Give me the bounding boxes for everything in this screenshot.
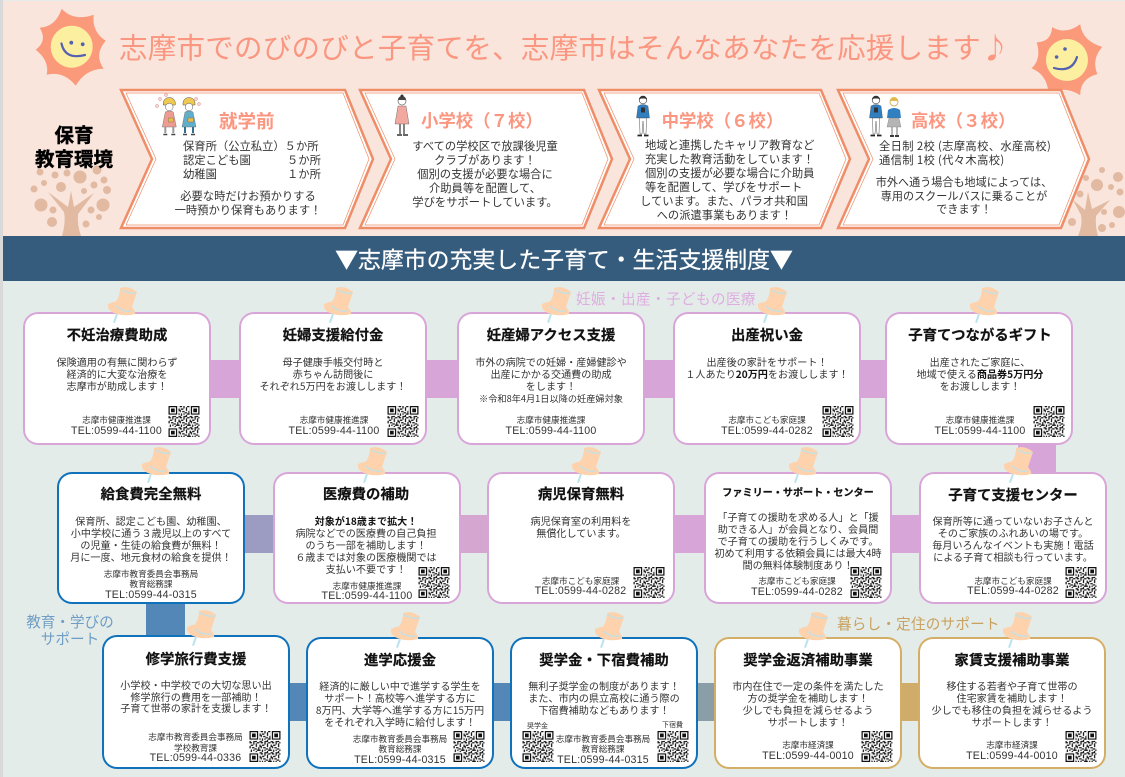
- card body: 8万円、大学等へ進学する方に15万円: [316, 702, 484, 717]
- pin: [795, 611, 829, 649]
- description: [412, 138, 558, 210]
- card title: 出産祝い金: [731, 324, 803, 345]
- facility counts: １か所: [287, 166, 321, 182]
- contact: TEL:0599-44-1100: [322, 590, 412, 602]
- heading: childcare and education environment: 保育: [54, 119, 94, 148]
- QR code: [850, 567, 882, 598]
- top peach header background: [3, 1, 1125, 236]
- card body: そのご家族のふれあいの場です。: [938, 525, 1088, 540]
- panel: junior high school: [597, 88, 852, 230]
- card body: をそれぞれ入学時に給付します！: [324, 714, 476, 729]
- card body: [510, 680, 698, 716]
- card: childcare support center: [919, 472, 1107, 604]
- contact: [510, 734, 696, 765]
- contact: TEL:0599-44-1100: [289, 425, 379, 437]
- pin: [142, 447, 171, 483]
- contact: TEL:0599-44-0010: [966, 750, 1058, 762]
- card body: １人あたり20万円をお渡しします！: [685, 366, 849, 381]
- card title: 子育てつながるギフト: [908, 324, 1052, 345]
- description: 等を配置して、学びをサポート: [645, 179, 802, 195]
- card body: [918, 680, 1106, 728]
- contact: [934, 414, 1025, 437]
- card body: 志摩市が助成します！: [67, 378, 167, 393]
- contact: [487, 576, 674, 596]
- contact: 志摩市こども家庭課: [728, 414, 806, 426]
- description: 個別の支援が必要な場合に介助員: [645, 165, 814, 181]
- contact: [919, 576, 1107, 596]
- card: pregnant women access support: [457, 312, 645, 445]
- pin: [542, 287, 571, 323]
- heading: 高校（３校）: [911, 108, 1015, 133]
- contact: [721, 414, 813, 437]
- contact: TEL:0599-44-0315: [557, 754, 649, 766]
- card body: 市内在住で一定の条件を満たした: [732, 678, 884, 693]
- heading: 中学校（６校）: [662, 108, 783, 133]
- contact: [918, 740, 1106, 762]
- pin: [785, 446, 819, 484]
- school counts: [879, 138, 1051, 168]
- card title: 病児保育無料: [538, 483, 624, 504]
- connector row 1: [205, 360, 1035, 398]
- card body: [704, 511, 892, 571]
- pin: [591, 611, 625, 649]
- contact: [71, 414, 162, 437]
- card body: で子育ての援助を行うしくみです。: [718, 533, 878, 548]
- contact: TEL:0599-44-0010: [762, 750, 854, 762]
- card body: 出産されたご家庭に、: [930, 354, 1030, 369]
- card body: [917, 354, 1044, 393]
- card body: 保険適用の有無に関わらず: [57, 354, 177, 369]
- chevron shape with illustration of a girl: [358, 88, 614, 230]
- card body: 少しでも負担を減らせるよう: [743, 702, 873, 717]
- card body: をお渡しします！: [940, 378, 1020, 393]
- contact: 教育総務課: [378, 743, 421, 755]
- description: 介助員等を配置して、: [429, 180, 541, 196]
- contact: TEL:0599-44-0315: [105, 588, 197, 600]
- boarding QR code: [656, 731, 688, 762]
- card body: 修学旅行の費用を一部補助！: [130, 689, 262, 704]
- contact: TEL:0599-44-1100: [506, 425, 596, 437]
- heading: 小学校（７校）: [421, 108, 543, 133]
- card body: をします！: [526, 378, 576, 393]
- card: childcare connection gift: [885, 312, 1073, 445]
- connector row 2 right: [670, 515, 925, 553]
- chevron shape with illustration of a boy: [597, 88, 852, 230]
- card body: [102, 679, 290, 714]
- school bus text: 市外へ通う場合も地域によっては、: [876, 174, 1052, 190]
- card body: 小学校・中学校での大切な思い出: [120, 677, 272, 692]
- contact: 志摩市経済課: [986, 738, 1038, 750]
- panel: preschool: [119, 88, 374, 230]
- card body: [273, 515, 459, 575]
- card body: 保育所等に通っていないお子さんと: [932, 513, 1094, 528]
- description: への派遣事業もあります！: [657, 207, 792, 223]
- card body: 住宅家賃を補助します！: [956, 690, 1068, 705]
- section banner: ▼志摩市の充実した子育て・生活支援制度▼: [335, 241, 793, 275]
- connector row 3 blue: [285, 683, 515, 721]
- pin: [758, 287, 787, 323]
- description: 個別の支援が必要な場合に: [417, 166, 553, 182]
- card body: [685, 354, 849, 381]
- QR code: [1065, 731, 1097, 762]
- pin: [999, 611, 1033, 649]
- card body: 移住する若者や子育て世帯の: [946, 678, 1078, 693]
- category label: education and learning support: 教育・学びの: [26, 611, 114, 632]
- card body: [475, 354, 627, 405]
- card body: 毎月いろんなイベントも実施！電話: [932, 537, 1094, 552]
- connector row 3 gold: [898, 683, 922, 721]
- school counts: 通信制 1校 (代々木高校): [879, 152, 1005, 168]
- heading: childcare and education environment: 教育環境: [35, 143, 113, 172]
- card title: 家賃支援補助事業: [954, 649, 1070, 670]
- card body: 母子健康手帳交付時と: [283, 354, 383, 369]
- card body: 出産後の家計をサポート！: [706, 354, 828, 369]
- card: scholarship and boarding subsidy: [510, 637, 698, 769]
- pin: [183, 609, 217, 647]
- card: rent support subsidy: [918, 637, 1106, 769]
- card body: サポートします！: [768, 714, 848, 729]
- card body: 市外の病院での妊婦・産婦健診や: [475, 354, 627, 369]
- contact: 志摩市健康推進課: [517, 414, 585, 426]
- panel: high school: [836, 88, 1090, 230]
- facility counts: [183, 138, 321, 182]
- card body: 病児保育室の利用料を: [531, 513, 631, 528]
- connector row 3 blue to gold: [695, 683, 717, 721]
- school counts: 全日制 2校 (志摩高校、水産高校): [879, 138, 1051, 154]
- contact: 志摩市こども家庭課: [758, 575, 836, 587]
- card body: 月に一度、地元食材の給食を提供！: [70, 549, 232, 564]
- QR code: [861, 731, 893, 762]
- contact: [288, 414, 379, 437]
- QR code: [249, 731, 281, 762]
- card body: [57, 515, 245, 563]
- card body: 支払い不要です！: [326, 561, 406, 576]
- card body: 保育所、認定こども園、幼稚園、: [75, 513, 227, 528]
- card body: の児童・生徒の給食費が無料！: [80, 537, 222, 552]
- card body: [260, 354, 406, 393]
- card title: 不妊治療費助成: [67, 324, 167, 345]
- card body: のうち一部を補助します！: [305, 537, 427, 552]
- pin: [1000, 446, 1034, 484]
- card body: ※令和8年4月1日以降の妊産婦対象: [479, 391, 623, 405]
- description: 地域と連携したキャリア教育など: [645, 137, 814, 153]
- facility counts: 幼稚園: [183, 166, 217, 182]
- contact: 志摩市こども家庭課: [542, 574, 619, 586]
- card body: による子育て相談も行っています。: [933, 549, 1093, 564]
- card: medical expense subsidy: [273, 472, 461, 604]
- card title: 進学応援金: [364, 649, 436, 670]
- card body: サポートします！: [972, 714, 1052, 729]
- card title: 妊婦支援給付金: [283, 324, 383, 345]
- lower background panel: [3, 281, 1125, 777]
- contact: TEL:0599-44-0336: [150, 752, 241, 764]
- contact: [102, 732, 289, 764]
- contact: 学校教育課: [174, 742, 217, 754]
- contact: TEL:0599-44-0282: [535, 585, 626, 597]
- card body: 間の無料体験制度あり！: [742, 557, 854, 572]
- card: scholarship repayment subsidy: [714, 637, 902, 769]
- contact: TEL:0599-44-0282: [751, 586, 843, 598]
- card: free school lunches: [57, 472, 245, 604]
- category label: education and learning support: サポート: [41, 628, 99, 649]
- contact: 志摩市教育委員会事務局: [148, 731, 243, 743]
- description: クラブがあります！: [434, 152, 536, 168]
- pin: [568, 446, 602, 484]
- contact: 志摩市健康推進課: [82, 414, 151, 426]
- scholarship QR code: [522, 731, 554, 762]
- category label: education and learning support: [26, 611, 114, 649]
- card body: 「子育ての援助を求める人」と「援: [717, 509, 879, 524]
- card title: ファミリー・サポート・センター: [722, 484, 874, 499]
- card body: [714, 680, 902, 728]
- card: pregnancy support benefit: [239, 312, 427, 445]
- contact: [57, 568, 245, 600]
- QR code: [388, 406, 418, 437]
- pin: [324, 287, 353, 323]
- icon: left smiling sun: [36, 8, 106, 86]
- pin: [387, 611, 421, 649]
- connector row 1 to row 2: [1018, 440, 1056, 480]
- card body: サポート！高校等へ進学する方に: [324, 690, 476, 705]
- chevron shape with illustration of two students: [836, 88, 1090, 230]
- boarding QR label: 下宿費: [662, 720, 683, 730]
- card body: 経済的に厳しい中で進学する学生を: [319, 678, 481, 693]
- category label: living and settlement support: 暮らし・定住のサポート: [837, 613, 1000, 634]
- card body: 下宿費補助などもあります！: [538, 702, 670, 717]
- card body: 方の奨学金を補助します！: [747, 690, 869, 705]
- school bus text: [876, 174, 1052, 217]
- card body: [487, 515, 675, 539]
- contact: TEL:0599-44-1100: [935, 425, 1025, 437]
- scholarship QR label: 奨学金: [527, 721, 548, 731]
- QR code: [418, 567, 450, 598]
- temporary childcare text: 必要な時だけお預かりする: [180, 188, 316, 204]
- contact: 志摩市教育委員会事務局: [104, 568, 198, 580]
- contact: TEL:0599-44-0282: [967, 585, 1059, 597]
- contact: [306, 734, 494, 765]
- card body: 対象が18歳まで拡大！: [315, 513, 417, 528]
- temporary childcare text: 一時預かり保育もあります！: [175, 202, 321, 218]
- contact: [714, 740, 902, 762]
- description: しています。また、パラオ共和国: [640, 193, 808, 209]
- contact: [506, 414, 596, 437]
- card body: それぞれ5万円をお渡しします！: [260, 378, 406, 393]
- contact: 志摩市健康推進課: [946, 414, 1014, 426]
- QR code: [168, 406, 200, 437]
- QR code: [1034, 406, 1064, 437]
- category label: pregnancy, birth and child medical care: 妊娠・出産・子どもの医療: [576, 288, 756, 309]
- card body: [919, 515, 1107, 563]
- description: すべての学校区で放課後児童: [412, 138, 558, 154]
- icon: left tree: [30, 166, 111, 236]
- left page edge: [0, 0, 3, 777]
- facility counts: 保育所（公立私立）５か所: [183, 138, 319, 154]
- card: school trip expense support: [102, 635, 290, 769]
- card body: また、市内の県立高校に通う際の: [528, 690, 680, 705]
- card body: 小中学校に通う３歳児以上のすべて: [71, 525, 231, 540]
- contact: TEL:0599-44-1100: [71, 425, 162, 437]
- panel: elementary school: [358, 88, 614, 230]
- card title: 奨学金返済補助事業: [743, 649, 873, 670]
- connector row 2 pink: [455, 515, 495, 553]
- card title: 修学旅行費支援: [146, 648, 246, 669]
- pin: [108, 287, 137, 323]
- contact: 志摩市教育委員会事務局: [353, 732, 447, 744]
- contact: TEL:0599-44-0315: [354, 754, 446, 766]
- card title: 子育て支援センター: [948, 484, 1078, 505]
- contact: 志摩市こども家庭課: [974, 574, 1052, 586]
- description: [640, 137, 814, 223]
- chevron shape with illustration of preschool children: [119, 88, 374, 230]
- card title: 奨学金・下宿費補助: [539, 649, 669, 670]
- QR code: [1065, 567, 1097, 598]
- description: 充実した教育活動をしています！: [645, 151, 814, 167]
- QR code: [633, 567, 665, 598]
- heading: 就学前: [219, 108, 275, 134]
- contact: 志摩市教育委員会事務局: [556, 732, 650, 744]
- card: fertility treatment subsidy: [23, 312, 211, 445]
- card body: 子育て世帯の家計を支援します！: [120, 700, 272, 715]
- contact: 志摩市健康推進課: [300, 414, 368, 426]
- card title: 妊産婦アクセス支援: [487, 324, 615, 345]
- title: 志摩市でのびのびと子育てを、志摩市はそんなあなたを応援します♪: [119, 26, 1010, 67]
- card body: 経済的に大変な治療を: [67, 366, 167, 381]
- card title: 給食費完全無料: [101, 483, 201, 504]
- description: 学びをサポートしています。: [412, 194, 558, 210]
- contact: 教育総務課: [130, 578, 172, 590]
- facility counts: 認定こども園: [183, 152, 251, 168]
- contact: 志摩市健康推進課: [333, 580, 401, 592]
- card: sick child care free: [487, 472, 675, 604]
- heading: childcare and education environment: [34, 119, 113, 172]
- school bus text: 専用のスクールバスに乗ることが: [881, 188, 1047, 204]
- contact: [273, 581, 461, 601]
- contact: 志摩市経済課: [782, 738, 834, 750]
- card body: ６歳までは対象の医療機関では: [295, 549, 437, 564]
- connector row 2 blue to pink: [240, 515, 278, 553]
- card body: [306, 680, 494, 728]
- card body: 出産にかかる交通費の助成: [490, 366, 612, 381]
- card body: 無利子奨学金の制度があります！: [528, 678, 680, 693]
- card body: 赤ちゃん訪問後に: [293, 366, 373, 381]
- QR code: [452, 731, 484, 762]
- icon: right smiling sun: [1032, 24, 1102, 96]
- card: family support center: [704, 472, 892, 604]
- icon: right tree: [1068, 167, 1125, 236]
- temporary childcare text: [175, 188, 321, 218]
- card body: 病院などでの医療費の自己負担: [295, 525, 437, 540]
- card body: [56, 354, 177, 393]
- card body: 少しでも移住の負担を減らせるよう: [932, 702, 1092, 717]
- card body: 助できる人」が会員となり、会員間: [718, 521, 878, 536]
- card: birth celebration money: [673, 312, 861, 445]
- pin: [970, 287, 999, 323]
- card title: 医療費の補助: [323, 483, 409, 504]
- section banner: [3, 236, 1125, 281]
- card body: 無償化しています。: [536, 525, 626, 540]
- QR code: [822, 406, 854, 437]
- facility counts: ５か所: [287, 152, 321, 168]
- contact: TEL:0599-44-0282: [721, 425, 813, 437]
- card: school advancement support money: [306, 637, 494, 769]
- card body: 初めて利用する依頼会員には最大4時: [714, 545, 882, 560]
- pin: [354, 446, 388, 484]
- contact: 教育総務課: [582, 743, 624, 755]
- school bus text: できます！: [936, 201, 992, 217]
- contact: [704, 576, 890, 598]
- card body: 地域で使える商品券5万円分: [917, 366, 1043, 381]
- connector row 2 to row 3: [146, 600, 185, 640]
